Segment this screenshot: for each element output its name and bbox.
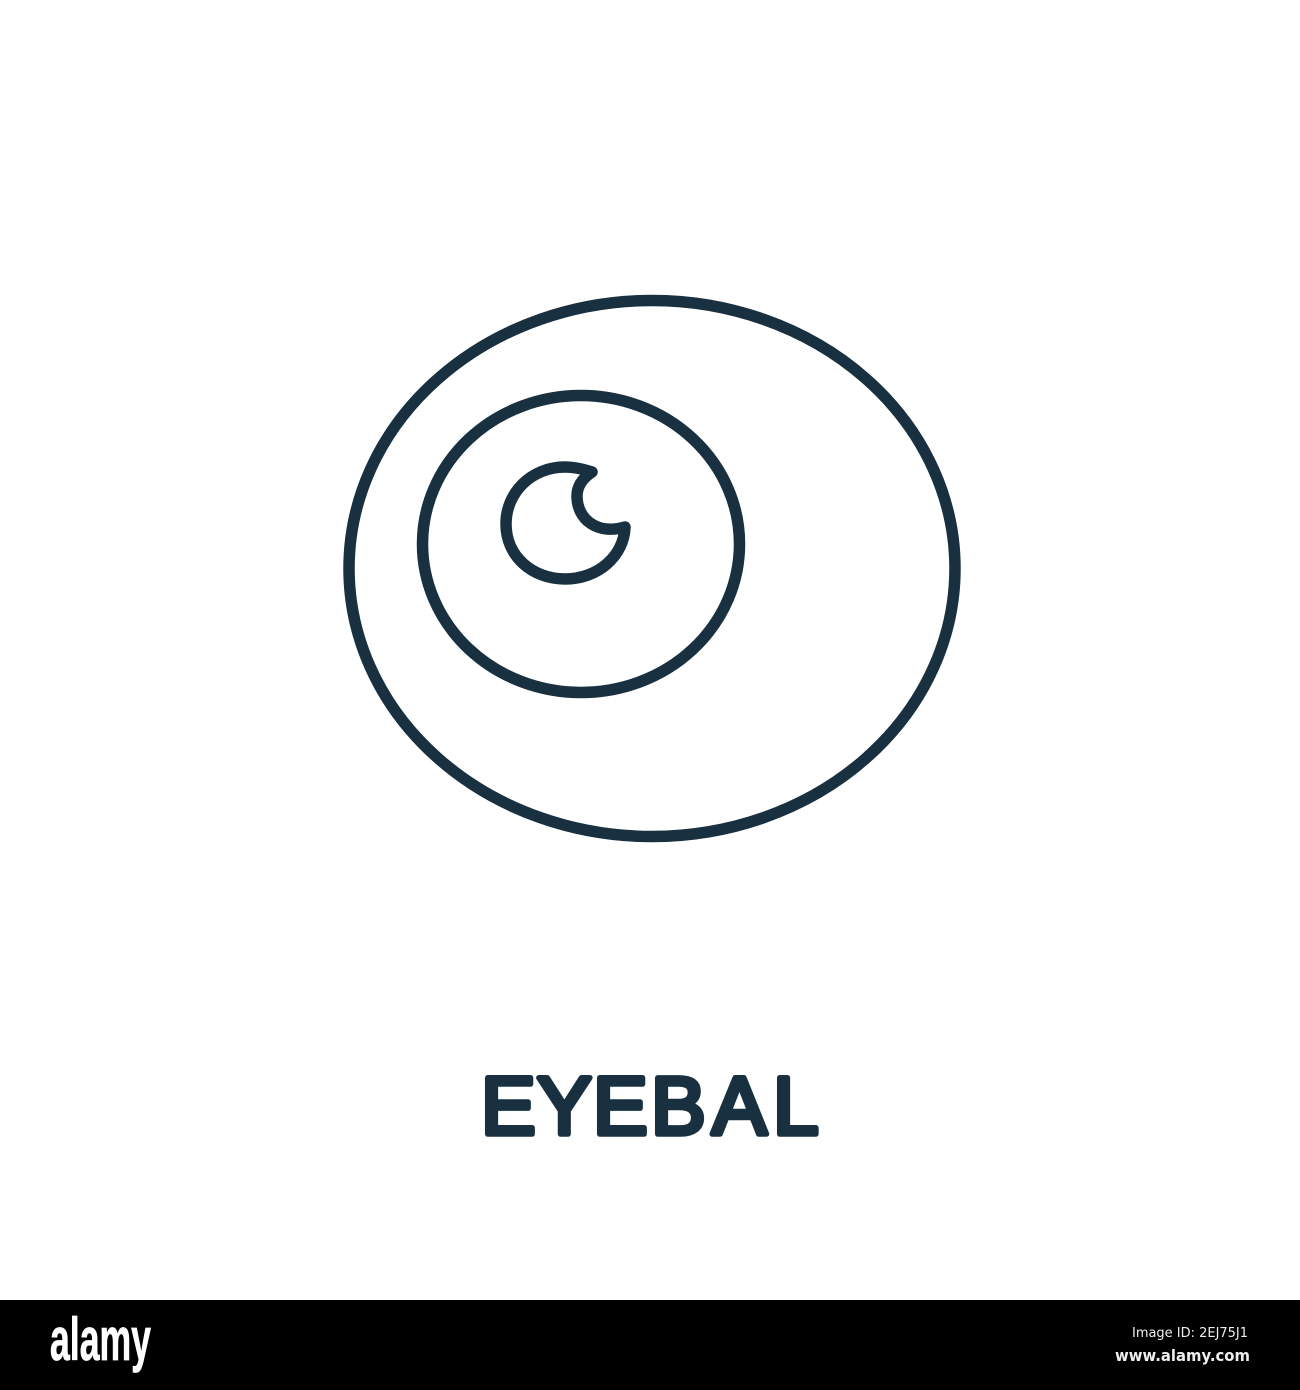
image ID: Image ID: 2EJ75J1 [1132,1325,1248,1341]
title: EYEBAL: EYEBAL [481,1061,819,1152]
iris ring [422,396,740,692]
footer band [0,1300,1300,1390]
icon: eyeball [349,300,955,836]
logo: alamy: alamy [50,1306,151,1373]
website: www.alamy.com [1115,1346,1250,1365]
pupil with crescent highlight [506,467,625,579]
eyeball outer outline [349,300,955,836]
